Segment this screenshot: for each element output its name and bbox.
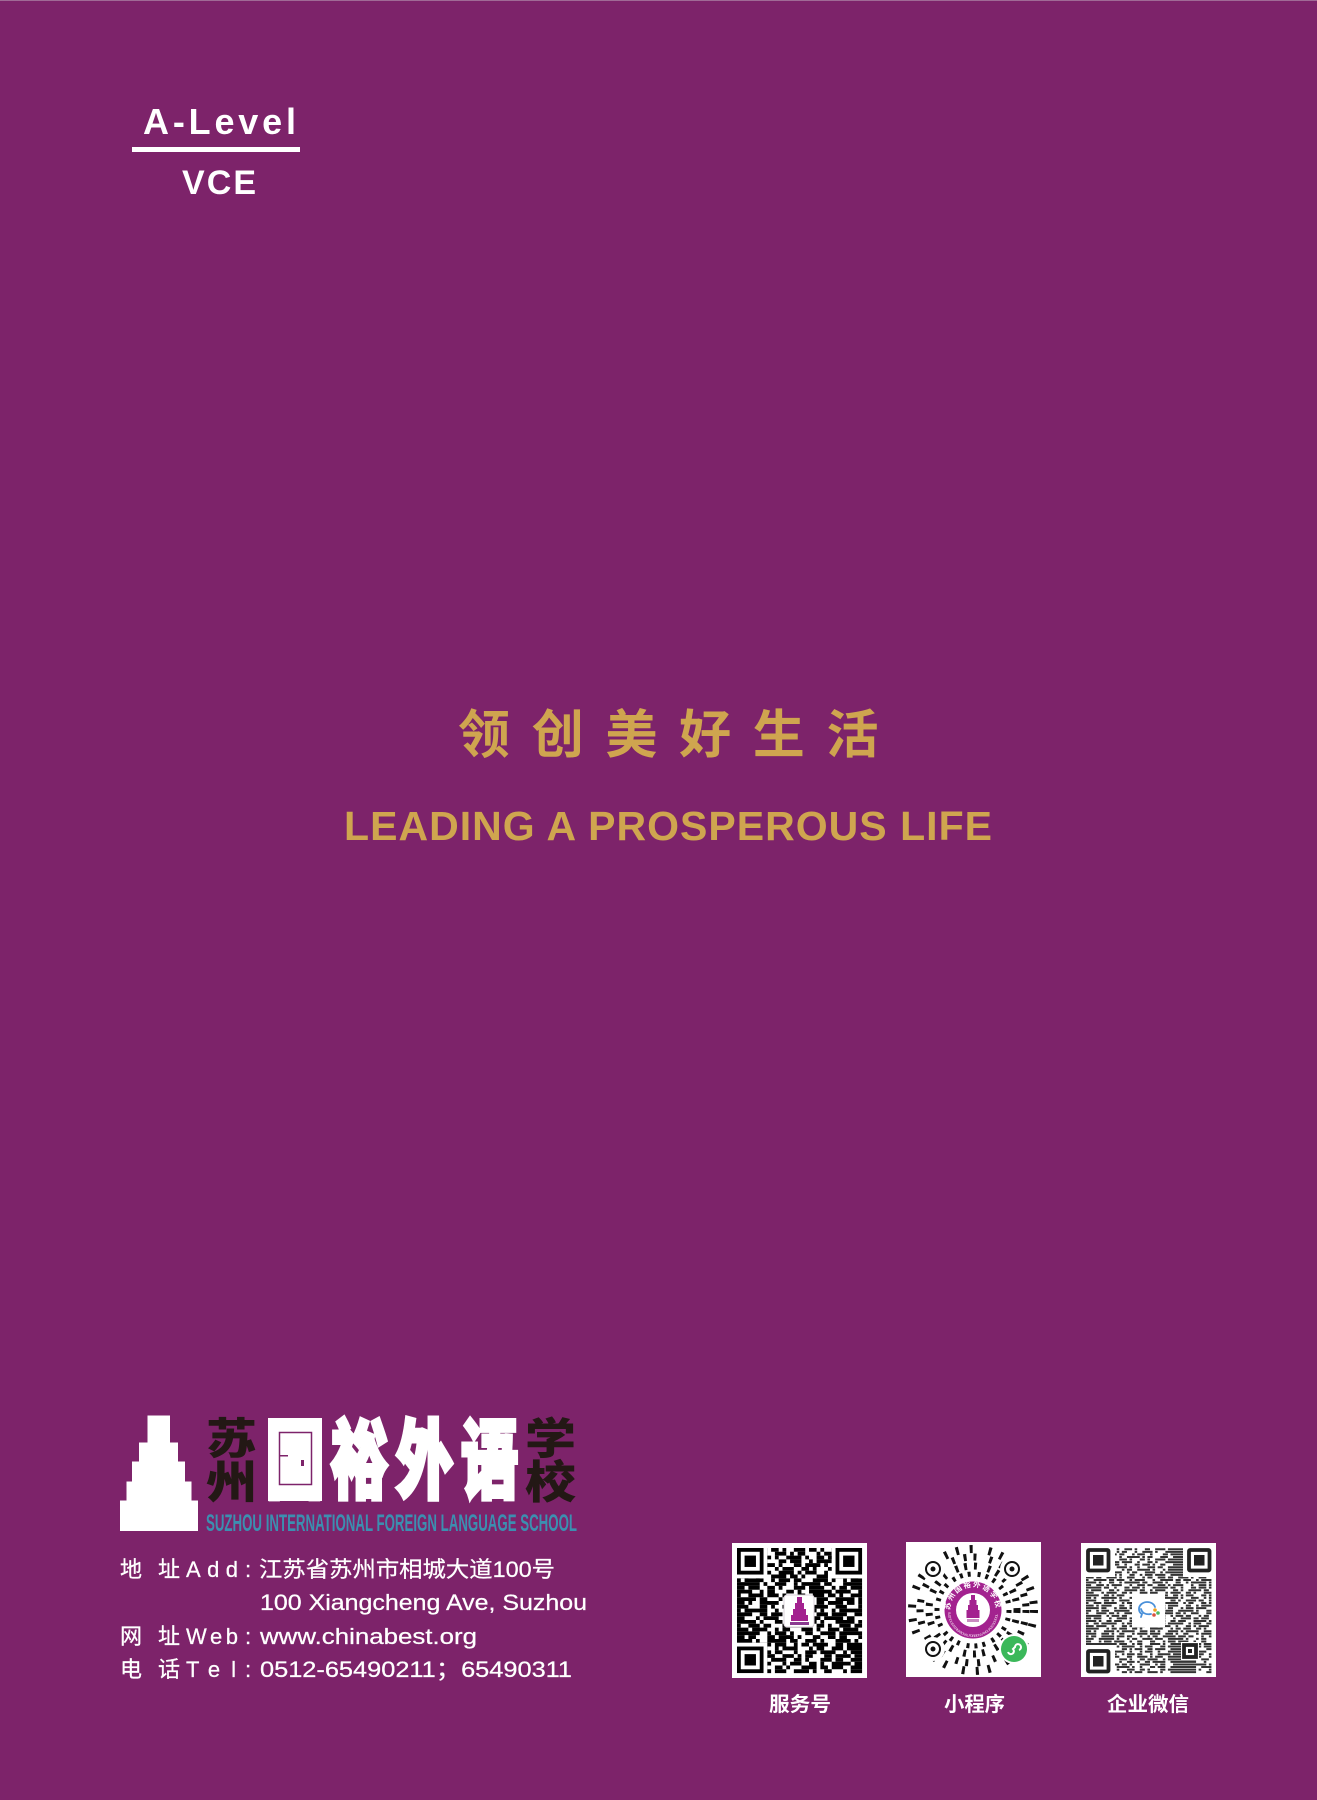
website line: Web bbox=[186, 1624, 238, 1649]
QR code: WeCom bbox=[1081, 1543, 1216, 1677]
telephone line: Tel bbox=[186, 1657, 236, 1682]
contact details bbox=[120, 1557, 587, 1682]
logo characters: Guo Yu Wai Yu: 语 bbox=[461, 1392, 518, 1516]
caption: WeCom: 企业微信 bbox=[1107, 1688, 1189, 1717]
website line: 网 bbox=[120, 1624, 142, 1649]
QR centre logo bbox=[784, 1595, 814, 1627]
address line English: 100 Xiangcheng Ave, Suzhou bbox=[260, 1590, 587, 1615]
logo characters: Xue Xiao bbox=[525, 1404, 576, 1511]
address line Chinese: 址 bbox=[158, 1557, 180, 1582]
telephone line: 0512-65490211；65490311 bbox=[260, 1657, 572, 1682]
telephone line: : bbox=[245, 1657, 251, 1682]
logo characters: Xue Xiao: 学 bbox=[525, 1404, 576, 1467]
logo characters: Su Zhou bbox=[206, 1404, 257, 1511]
finder dots bbox=[926, 1562, 1019, 1656]
WeCom finder patterns bbox=[1084, 1546, 1215, 1676]
logo characters: Guo Yu Wai Yu bbox=[266, 1392, 518, 1516]
telephone line: 电 bbox=[120, 1657, 142, 1682]
corner masks bbox=[921, 1557, 1029, 1664]
logo characters: Guo Yu Wai Yu: 裕 bbox=[331, 1392, 388, 1516]
logo English name: SUZHOU INTERNATIONAL FOREIGN LANGUAGE SCHOOL bbox=[206, 1510, 577, 1537]
mini-program code bbox=[906, 1542, 1041, 1677]
website line: 址 bbox=[158, 1624, 180, 1649]
logo characters: Su Zhou: 苏 bbox=[206, 1404, 257, 1467]
programme badge: A-Level / VCE bbox=[132, 101, 300, 202]
telephone line bbox=[120, 1657, 572, 1682]
telephone line: 话 bbox=[158, 1657, 180, 1682]
icon: WeCom chat bubbles bbox=[1139, 1602, 1160, 1617]
icon: mini-program badge bbox=[1001, 1636, 1027, 1662]
school seal bbox=[944, 1582, 1002, 1638]
logo characters: Xue Xiao: 校 bbox=[525, 1446, 576, 1511]
address line Chinese: 江苏省苏州市相城大道100号 bbox=[259, 1557, 555, 1582]
website line bbox=[120, 1624, 477, 1649]
logo characters: Guo Yu Wai Yu: 国 bbox=[266, 1392, 323, 1516]
slogan in Chinese: 领 bbox=[458, 693, 510, 768]
caption: mini program: 小程序 bbox=[944, 1688, 1005, 1717]
caption: service account: 服务号 bbox=[769, 1688, 831, 1717]
programme badge: A-Level / VCE: VCE bbox=[182, 164, 256, 202]
slogan in Chinese: 生 bbox=[753, 693, 805, 768]
icon: stepped pyramid bbox=[120, 1416, 198, 1531]
slogan in English: LEADING A PROSPEROUS LIFE bbox=[344, 803, 992, 849]
logo characters: Su Zhou: 州 bbox=[206, 1446, 257, 1511]
finder patterns bbox=[735, 1546, 864, 1675]
slogan in Chinese: 好 bbox=[679, 693, 731, 768]
slogan in Chinese: 创 bbox=[532, 693, 584, 768]
website line: : bbox=[245, 1624, 251, 1649]
school logo bbox=[120, 1392, 577, 1537]
address line Chinese: : bbox=[245, 1557, 251, 1582]
school seal: SUZHOU INTERNATIONAL FOREIGN LANGUAGE SCHOOL bbox=[948, 1612, 998, 1637]
address line Chinese bbox=[120, 1557, 555, 1582]
website line: www.chinabest.org bbox=[259, 1624, 477, 1649]
slogan in Chinese bbox=[458, 693, 879, 768]
school seal: 苏州国裕外语学校 bbox=[944, 1582, 1002, 1610]
slogan in Chinese: 活 bbox=[826, 693, 879, 768]
QR code: service account bbox=[732, 1543, 867, 1678]
address line Chinese: Add bbox=[186, 1557, 238, 1582]
address line Chinese: 地 bbox=[120, 1557, 142, 1582]
programme badge: A-Level / VCE: A-Level bbox=[143, 101, 296, 142]
logo characters: Guo Yu Wai Yu: 外 bbox=[396, 1392, 453, 1516]
slogan in Chinese: 美 bbox=[605, 693, 657, 768]
